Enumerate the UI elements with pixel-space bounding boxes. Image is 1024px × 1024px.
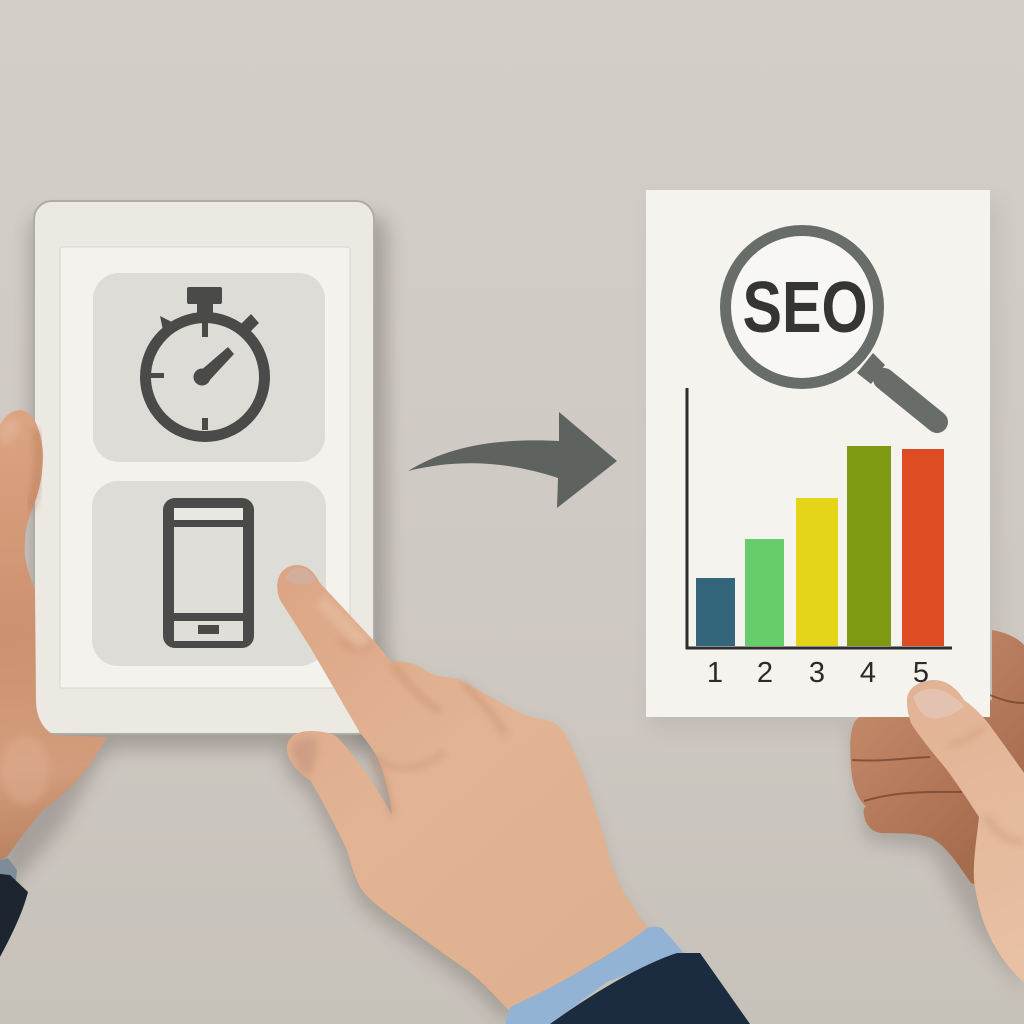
left shirt cuff [0,858,17,880]
bar chart [687,388,952,689]
panel: stopwatch tile [93,273,325,462]
axis labels: 5 [913,657,929,689]
icon: smartphone [163,498,254,648]
report card [646,190,990,717]
icon: stopwatch [146,287,264,436]
left jacket sleeve [0,874,28,957]
axis labels [707,657,929,689]
SEO label: SEO [742,268,868,348]
tablet [34,201,374,734]
axis labels: 3 [809,657,825,689]
axis labels: 4 [860,657,876,689]
thumb shading [292,738,316,778]
knuckle and finger creases [340,640,505,815]
axis labels: 1 [707,657,723,689]
axis labels: 2 [757,657,773,689]
index fingernail [286,568,316,585]
shirt cuff [505,926,684,1024]
left hand holding tablet [0,410,107,957]
pointing hand [277,565,750,1024]
right hand thumb and palm [907,680,1024,983]
bar 2 [745,539,784,646]
tablet screen [60,247,350,688]
jacket sleeve [550,953,750,1024]
thumbnail [913,689,964,718]
right hand fingers behind card [850,630,1024,900]
bar 5 [902,449,944,646]
panel: phone tile [92,481,326,666]
arrow [408,412,617,508]
bar 3 [796,498,838,646]
bar 1 [696,578,735,646]
icon: SEO magnifying glass [726,230,937,422]
bar 4 [847,446,891,646]
